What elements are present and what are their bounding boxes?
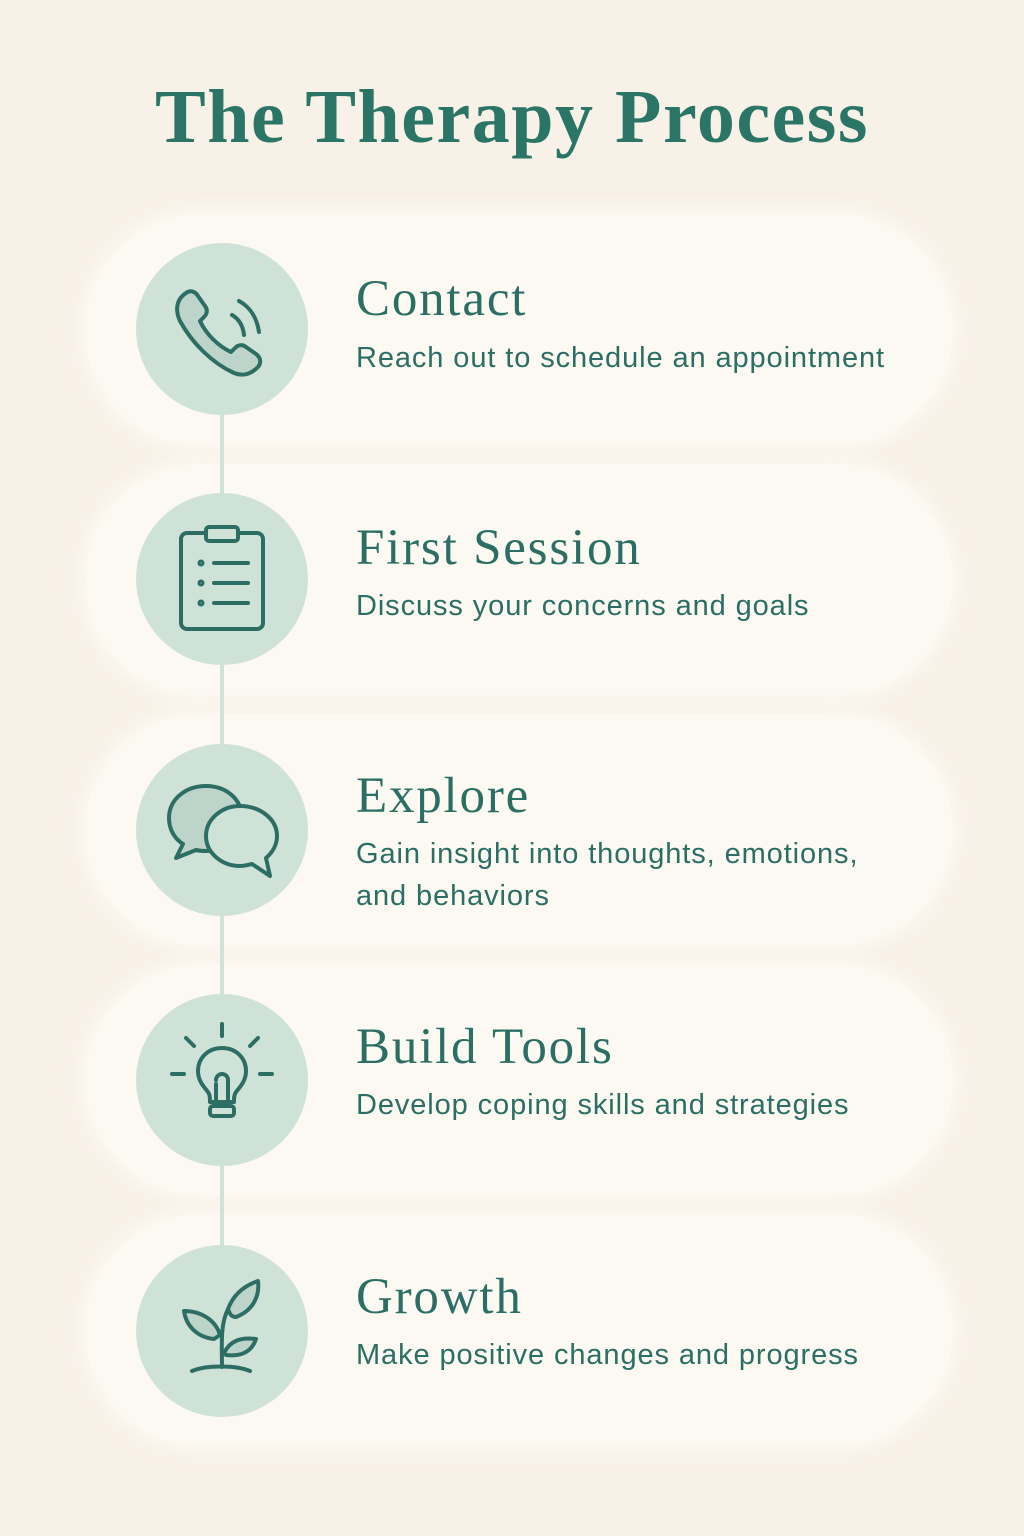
panel: build tools bbox=[85, 964, 953, 1196]
heading: build tools: Build Tools bbox=[356, 1019, 614, 1075]
heading: first session: First Session bbox=[356, 520, 642, 576]
panel: growth bbox=[85, 1214, 953, 1446]
panel: explore bbox=[85, 714, 953, 946]
icon: phone bbox=[136, 243, 308, 415]
heading: contact: Contact bbox=[356, 271, 527, 327]
heading: explore: Explore bbox=[356, 768, 530, 824]
text: growth: Make positive changes and progress bbox=[356, 1339, 859, 1371]
panel: contact bbox=[85, 214, 953, 446]
text: contact: Reach out to schedule an appointment bbox=[356, 342, 885, 374]
connector line bbox=[220, 400, 224, 1280]
text: build tools: Develop coping skills and strategies bbox=[356, 1089, 849, 1121]
icon: lightbulb bbox=[136, 994, 308, 1166]
text: explore: and behaviors bbox=[356, 880, 550, 912]
panel: first session bbox=[85, 464, 953, 696]
heading: growth: Growth bbox=[356, 1269, 523, 1325]
text: first session: Discuss your concerns and goals bbox=[356, 590, 809, 622]
icon: sprout bbox=[136, 1245, 308, 1417]
icon: chat bubbles bbox=[136, 744, 308, 916]
text: explore: Gain insight into thoughts, emotions, bbox=[356, 838, 858, 870]
text: explore bbox=[356, 838, 858, 912]
icon: clipboard bbox=[136, 493, 308, 665]
title: The Therapy Process bbox=[155, 75, 869, 159]
